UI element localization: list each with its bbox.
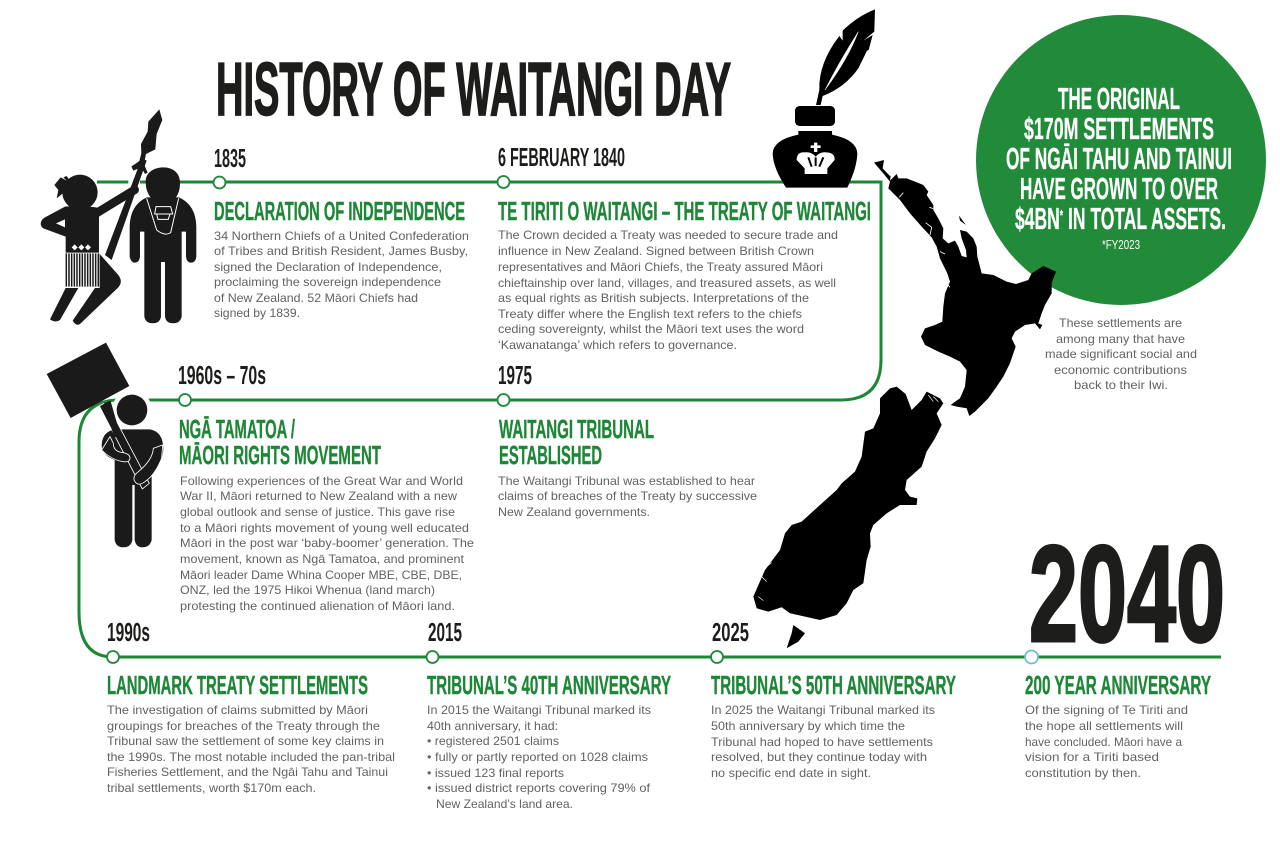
panel: 1975 Waitangi Tribunal: 1975 [498, 362, 532, 390]
timeline nodes [107, 176, 1038, 664]
panel: 2015 Tribunal's 40th Anniversary: New Zealand’s land area. [436, 797, 573, 811]
panel: 1840 Te Tiriti o Waitangi: as equal rights as British subjects. Interpretations of the [498, 291, 809, 305]
settlements note: back to their Iwi. [1074, 378, 1168, 392]
settlements note: made significant social and [1045, 347, 1197, 361]
panel: 1960s–70s Ngā Tamatoa: ONZ, led the 1975 Hikoi Whenua (land march) [180, 583, 435, 597]
panel: 2015 Tribunal's 40th Anniversary: TRIBUNAL’S 40TH ANNIVERSARY [427, 670, 671, 700]
panel: 1975 Waitangi Tribunal [498, 362, 757, 519]
panel: 1990s Landmark Treaty Settlements [107, 619, 395, 795]
panel: 1835 Declaration of Independence: 1835 [214, 145, 246, 173]
panel: 2025 Tribunal's 50th Anniversary [711, 619, 956, 780]
panel: 1960s–70s Ngā Tamatoa: NGĀ TAMATOA / [179, 414, 295, 444]
map: North Island [874, 160, 1056, 416]
panel: 1835 Declaration of Independence: proclaiming the sovereign independence [214, 275, 441, 289]
panel: 1975 Waitangi Tribunal: The Waitangi Tribunal was established to hear [498, 474, 755, 488]
settlements note: among many that have [1056, 332, 1185, 346]
panel: 1990s Landmark Treaty Settlements: The investigation of claims submitted by Māori [107, 703, 368, 717]
panel: 1960s–70s Ngā Tamatoa: movement, known as Ngā Tamatoa, and prominent [180, 552, 465, 566]
panel: 2015 Tribunal's 40th Anniversary: • registered 2501 claims [427, 734, 559, 748]
settlements note: economic contributions [1054, 363, 1187, 377]
panel: 2015 Tribunal's 40th Anniversary: 40th anniversary, it had: [427, 719, 558, 733]
panel: 1840 Te Tiriti o Waitangi: ‘Kawanatanga’ which refers to governance. [498, 338, 737, 352]
panel: 1990s Landmark Treaty Settlements: the 1990s. The most notable included the pan-tribal [107, 750, 395, 764]
panel: 1975 Waitangi Tribunal: ESTABLISHED [499, 440, 602, 470]
panel: 1975 Waitangi Tribunal: claims of breaches of the Treaty by successive [498, 489, 757, 503]
panel: 1960s–70s Ngā Tamatoa: protesting the continued alienation of Māori land. [180, 599, 455, 613]
panel: 1990s Landmark Treaty Settlements: Tribunal saw the settlement of some key claims in [107, 734, 384, 748]
green stat circle [976, 15, 1266, 305]
panel: 1835 Declaration of Independence [214, 145, 469, 320]
panel: 2015 Tribunal's 40th Anniversary: • issued 123 final reports [427, 766, 564, 780]
panel: 1840 Te Tiriti o Waitangi: The Crown decided a Treaty was needed to secure trade and [498, 228, 838, 242]
panel: 2025 Tribunal's 50th Anniversary: In 2025 the Waitangi Tribunal marked its [711, 703, 935, 717]
panel: 2040 200 Year Anniversary: have concluded. Māori have a [1025, 735, 1182, 749]
panel: 1960s–70s Ngā Tamatoa: to a Māori rights movement of young well educated [180, 521, 469, 535]
panel: 1960s–70s Ngā Tamatoa: War II, Māori returned to New Zealand with a new [180, 489, 458, 503]
panel: 1840 Te Tiriti o Waitangi: chieftainship over land, villages, and treasured assets, as well [498, 276, 836, 290]
panel: 2040 200 Year Anniversary: constitution by then. [1025, 766, 1141, 780]
settlements note: These settlements are [1059, 316, 1182, 330]
panel: 2025 Tribunal's 50th Anniversary: 50th anniversary by which time the [711, 719, 905, 733]
panel: 1835 Declaration of Independence: DECLARATION OF INDEPENDENCE [214, 196, 465, 226]
panel: 1835 Declaration of Independence: signed the Declaration of Independence, [214, 260, 442, 274]
panel: 2025 Tribunal's 50th Anniversary: TRIBUNAL’S 50TH ANNIVERSARY [711, 670, 956, 700]
panel: 1835 Declaration of Independence: of New Zealand. 52 Māori Chiefs had [214, 291, 418, 305]
panel: 2015 Tribunal's 40th Anniversary: In 2015 the Waitangi Tribunal marked its [427, 703, 651, 717]
panel: 2015 Tribunal's 40th Anniversary [427, 619, 671, 811]
panel: 1840 Te Tiriti o Waitangi: TE TIRITI O WAITANGI – THE TREATY OF WAITANGI [498, 196, 871, 226]
panel: 2025 Tribunal's 50th Anniversary: Tribunal had hoped to have settlements [711, 735, 933, 749]
panel: 2015 Tribunal's 40th Anniversary: 2015 [428, 619, 462, 647]
panel: 1960s–70s Ngā Tamatoa [178, 362, 474, 613]
panel: 1990s Landmark Treaty Settlements: tribal settlements, worth $170m each. [107, 781, 316, 795]
panel: 1960s–70s Ngā Tamatoa: Māori leader Dame Whina Cooper MBE, CBE, DBE, [180, 568, 462, 582]
timeline path [79, 182, 1221, 657]
panel: 1835 Declaration of Independence: 34 Northern Chiefs of a United Confederation [214, 229, 469, 243]
panel: 1840 Te Tiriti o Waitangi: ceding sovereignty, whilst the Māori text uses the word [498, 322, 804, 336]
stat headline in circle: * [1060, 207, 1063, 224]
panel: 2040 200 Year Anniversary: the hope all settlements will [1025, 719, 1183, 733]
panel: 2025 Tribunal's 50th Anniversary: resolved, but they continue today with [711, 750, 927, 764]
stat headline in circle: *FY2023 [1102, 237, 1140, 252]
panel: 2025 Tribunal's 50th Anniversary: no specific end date in sight. [711, 766, 871, 780]
panel: 2025 Tribunal's 50th Anniversary: 2025 [712, 619, 749, 647]
panel: 1840 Te Tiriti o Waitangi: representatives and Māori Chiefs, the Treaty assured Māori [498, 260, 823, 274]
panel: 1990s Landmark Treaty Settlements: 1990s [107, 619, 150, 647]
panel: 1975 Waitangi Tribunal: WAITANGI TRIBUNAL [499, 414, 654, 444]
panel: 2015 Tribunal's 40th Anniversary: • fully or partly reported on 1028 claims [427, 750, 648, 764]
panel: 1990s Landmark Treaty Settlements: groupings for breaches of the Treaty through the [107, 719, 380, 733]
panel: 1840 Te Tiriti o Waitangi: influence in New Zealand. Signed between British Crown [498, 244, 814, 258]
panel: 2040 200 Year Anniversary [1025, 518, 1225, 780]
panel: 2015 Tribunal's 40th Anniversary: • issued district reports covering 79% of [427, 781, 651, 795]
icon: Māori warrior and British Resident figures [41, 109, 196, 325]
panel: 1835 Declaration of Independence: of Tribes and British Resident, James Busby, [214, 244, 468, 258]
panel: 1960s–70s Ngā Tamatoa: Following experiences of the Great War and World [180, 474, 463, 488]
panel: 1840 Te Tiriti o Waitangi [498, 144, 871, 352]
icon: protest figure with placard [47, 343, 163, 547]
panel: 1835 Declaration of Independence: signed by 1839. [214, 306, 300, 320]
panel: 2040 200 Year Anniversary: Of the signing of Te Tiriti and [1025, 703, 1188, 717]
panel: 1975 Waitangi Tribunal: New Zealand governments. [498, 505, 650, 519]
panel: 1840 Te Tiriti o Waitangi: Treaty differ where the English text refers to the chiefs [498, 307, 802, 321]
panel: 1990s Landmark Treaty Settlements: LANDMARK TREATY SETTLEMENTS [107, 670, 368, 700]
panel: 1990s Landmark Treaty Settlements: Fisheries Settlement, and the Ngāi Tahu and Tainui [107, 765, 388, 779]
title: HISTORY OF WAITANGI DAY [216, 47, 731, 131]
stat headline in circle: $4BN [1015, 201, 1094, 236]
panel: 1960s–70s Ngā Tamatoa: Māori in the post war ‘baby-boomer’ generation. The [180, 536, 474, 550]
panel: 1840 Te Tiriti o Waitangi: 6 FEBRUARY 1840 [498, 144, 625, 172]
stat headline in circle: THE ORIGINAL [1058, 81, 1180, 116]
stat headline in circle [1006, 81, 1232, 252]
panel: 1960s–70s Ngā Tamatoa: 1960s – 70s [178, 362, 266, 390]
icon: inkwell with feather quill and crown [773, 9, 875, 188]
settlements note [1045, 316, 1197, 392]
map: South Island [753, 385, 943, 648]
panel: 2040 200 Year Anniversary: vision for a Tiriti based [1025, 750, 1159, 764]
panel: 1960s–70s Ngā Tamatoa: MĀORI RIGHTS MOVEMENT [179, 440, 381, 470]
panel: 1960s–70s Ngā Tamatoa: global outlook and sense of justice. This gave rise [180, 505, 455, 519]
